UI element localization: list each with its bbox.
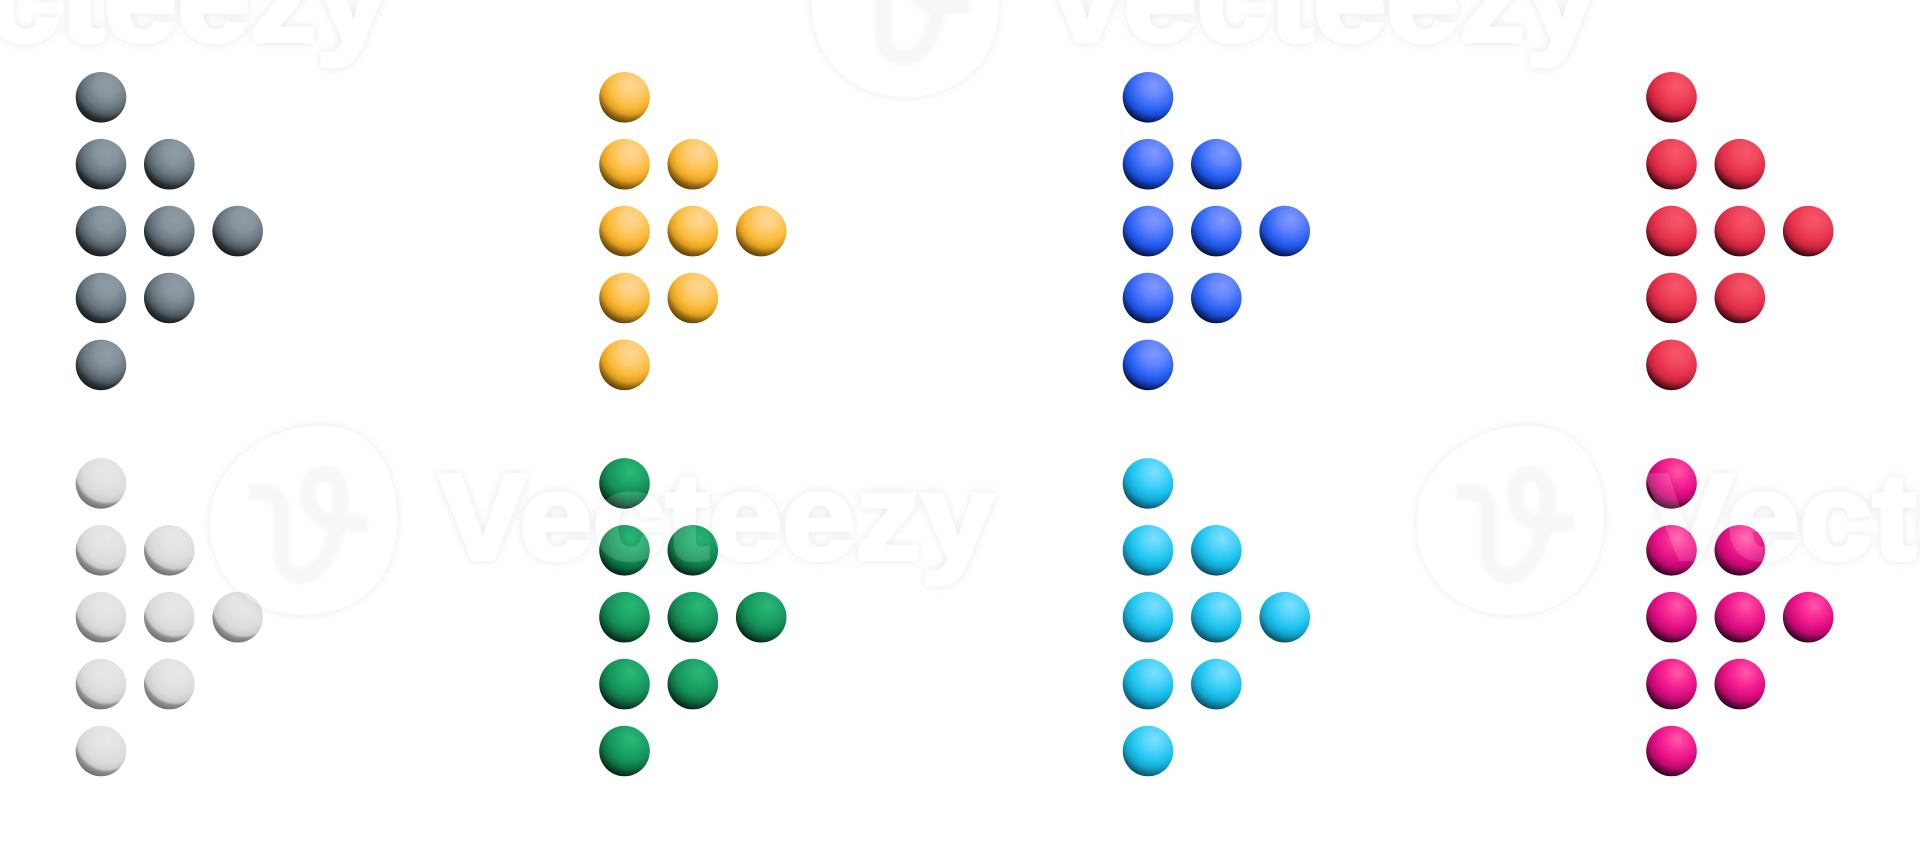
arrow: blue spheres <box>1123 72 1310 390</box>
arrow: grey spheres <box>76 72 263 390</box>
arrow: cyan spheres <box>1123 458 1310 776</box>
arrow: green spheres <box>599 458 786 776</box>
arrow: pink spheres <box>1646 458 1834 776</box>
arrow: red spheres <box>1646 72 1834 390</box>
arrow: yellow spheres <box>599 72 786 390</box>
arrow: white spheres <box>76 458 263 776</box>
watermark logo: lower right <box>1417 426 1604 615</box>
watermark text: lower centre: Vecteezy <box>439 449 994 585</box>
watermark logo: top centre <box>812 0 999 97</box>
watermark logo: lower left <box>210 426 397 615</box>
